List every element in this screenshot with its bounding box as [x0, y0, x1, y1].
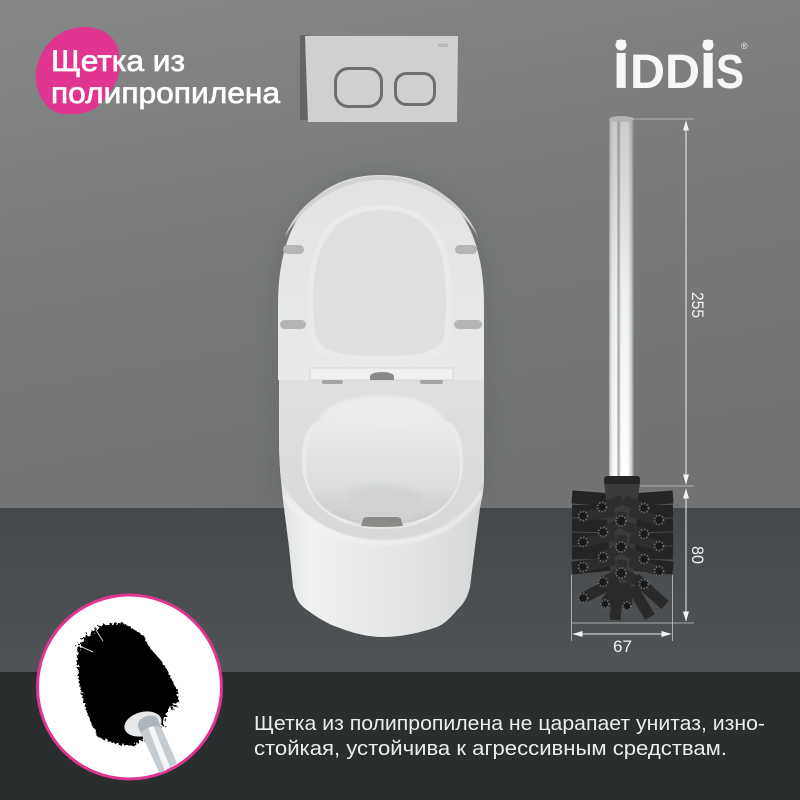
inset brush [77, 623, 179, 774]
brush collar [604, 476, 640, 484]
height 80 arrow [685, 489, 687, 621]
seat lid [278, 175, 484, 380]
small flush button [396, 74, 434, 104]
bowl opening [302, 419, 463, 529]
inset circle [38, 595, 222, 779]
label 255: 255 [688, 292, 707, 318]
width 67 arrow [573, 633, 671, 635]
lid recess rim [308, 205, 452, 362]
rear rim highlight [318, 396, 445, 428]
lid inner recess [313, 210, 446, 356]
lid top edge [285, 176, 478, 237]
label 80: 80 [688, 546, 707, 564]
bowl rim edge highlight [283, 492, 482, 543]
bowl interior [306, 420, 460, 525]
right lower bumper [454, 320, 482, 329]
left lower bumper [280, 320, 306, 329]
logo wordmark: D [630, 46, 665, 99]
logo iDDiS [612, 28, 748, 102]
dark caption band [0, 672, 800, 800]
description text: стойкая, устойчива к агрессивным средствам. [254, 738, 727, 760]
right upper bumper [455, 245, 477, 254]
logo wordmark: i [699, 28, 717, 102]
height 255 arrow [685, 121, 687, 484]
dimension lines [572, 119, 694, 641]
plate [305, 36, 458, 122]
logo wordmark: D [665, 46, 700, 99]
inset bristle highlights [82, 630, 103, 652]
logo first dot [616, 40, 626, 50]
flush plate [300, 35, 458, 122]
bowl body [279, 380, 484, 637]
inset collar [124, 711, 162, 737]
round inset: brush closeup [38, 595, 222, 779]
left hinge [322, 380, 343, 384]
bowl rim surface [279, 380, 484, 540]
floor band [0, 508, 800, 673]
logo wordmark: S [716, 46, 744, 99]
drain [361, 517, 403, 527]
logo wordmark: i [612, 28, 630, 102]
description text: Щетка из полипропилена не царапает унитаз, изно- [254, 713, 765, 735]
hinge cover [310, 368, 453, 380]
left upper bumper [283, 245, 304, 254]
inset handle highlights [148, 726, 170, 771]
heading text: полипропилена [51, 77, 280, 110]
front bristle tufts [583, 500, 659, 584]
brush product view [572, 116, 673, 620]
bristle tuft ends [578, 502, 664, 610]
right hinge [420, 380, 443, 384]
registered mark: ® [741, 41, 748, 51]
inset handle top [138, 716, 161, 733]
plate shadow [300, 35, 308, 120]
large flush button [336, 68, 382, 106]
logo second dot [702, 40, 714, 50]
pink blob [36, 27, 120, 114]
heading with pink blob [36, 27, 280, 114]
inset handle body [138, 716, 177, 774]
label 67: 67 [613, 637, 632, 656]
heading text: Щетка из [51, 45, 185, 78]
inset bristles [77, 623, 179, 746]
basin shade [348, 486, 423, 523]
hinge button [370, 372, 394, 380]
extension lines [572, 119, 694, 641]
toilet shadow [272, 172, 490, 500]
bottom fan tufts [583, 578, 665, 620]
plate brand mark: iddis [438, 43, 449, 49]
chrome handle [609, 116, 634, 481]
back bristle tufts [572, 497, 673, 568]
brush core [604, 482, 640, 600]
wall-hung toilet [272, 172, 490, 637]
wall background [0, 0, 800, 508]
